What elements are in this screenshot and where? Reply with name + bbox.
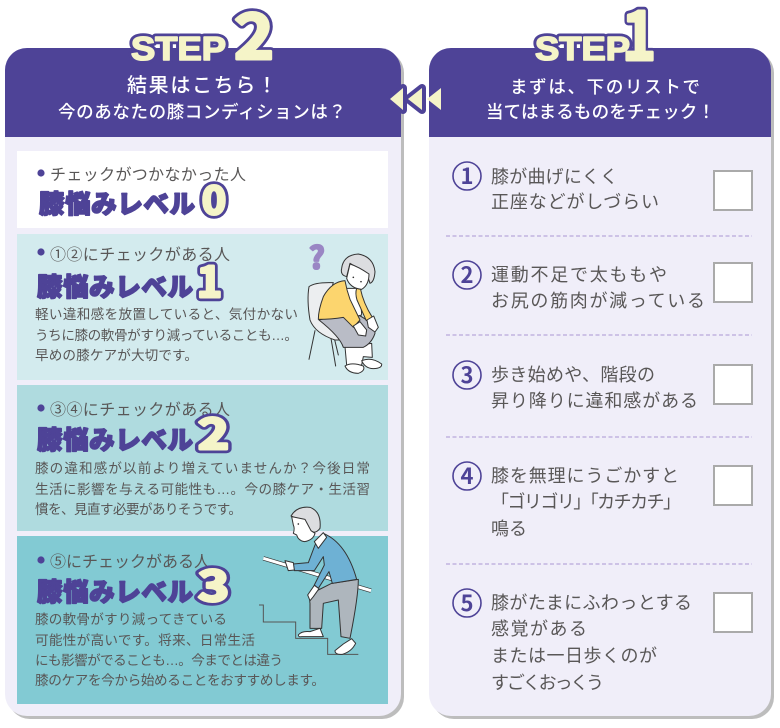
- checklist item 5: または一日歩くのが: [491, 646, 657, 666]
- checklist item 5: [453, 586, 752, 693]
- result: level 1: [17, 234, 388, 380]
- illustration: seated elderly woman with question mark: [308, 233, 382, 373]
- heading: step 1 header text: [486, 77, 715, 122]
- result: level 0: 膝悩みレベル: [39, 191, 195, 219]
- result: level 3: ⑤にチェックがある人: [50, 553, 210, 571]
- result: level 2: ③④にチェックがある人: [50, 401, 230, 419]
- result: level 1: ①②にチェックがある人: [50, 246, 230, 264]
- checklist item 5: 感覚がある: [491, 619, 587, 639]
- heading: step 2 header text: 今のあなたの膝コンディションは？: [58, 102, 346, 122]
- checklist item 5: 膝がたまにふわっとする: [491, 593, 692, 613]
- arrows: pointing from step 1 to step 2: [390, 88, 441, 110]
- checklist item 3: 3: [461, 358, 473, 390]
- checklist item 5: すごくおっくう: [491, 673, 604, 693]
- checklist item 3: 歩き始めや、階段の: [491, 365, 655, 385]
- step 1 badge: STEP: [535, 30, 630, 67]
- heading: step 1 header text: まずは、下のリストで: [510, 77, 700, 97]
- result: level 0: [17, 151, 388, 228]
- result: level 1: うちに膝の軟骨がすり減っていることも…。: [35, 327, 298, 343]
- step 2 badge: STEP: [131, 30, 226, 67]
- result: level 2: 2: [198, 401, 229, 462]
- result: level 2: 2: [198, 401, 229, 462]
- checklist item 1: 膝が曲げにくく: [491, 167, 618, 187]
- panel: step 2 results: [5, 48, 404, 719]
- result: level 1: 膝悩みレベル: [37, 274, 193, 302]
- result: level 3: [17, 536, 388, 704]
- result: level 2: [17, 385, 388, 531]
- checklist item 1: 1: [461, 159, 473, 191]
- checklist item 2: 運動不足で太ももや: [491, 265, 667, 285]
- checklist item 3: 昇り降りに違和感がある: [491, 391, 698, 411]
- panel: step 1 checklist: [429, 48, 774, 719]
- checklist item 2: [453, 258, 752, 311]
- checklist item 4: 「ゴリゴリ」「カチカチ」: [491, 492, 681, 512]
- heading: step 1 header text: 当てはまるものをチェック！: [486, 102, 715, 122]
- checklist item 3: [453, 358, 752, 411]
- result: level 3: 可能性が高いです。将来、日常生活: [35, 632, 255, 648]
- step 1 badge: [535, 0, 656, 80]
- result: level 2: 膝の違和感が以前より増えていませんか？今後日常: [35, 460, 370, 476]
- checklist item 2: お尻の筋肉が減っている: [491, 291, 705, 311]
- result: level 2: 慣を、見直す必要がありそうです。: [35, 501, 242, 517]
- result: level 0: チェックがつかなかった人: [50, 166, 246, 184]
- result: level 1: 早めの膝ケアが大切です。: [35, 348, 198, 363]
- checklist item 1: 正座などがしづらい: [491, 192, 659, 212]
- checklist item 2: 2: [461, 258, 473, 290]
- result: level 2: 膝悩みレベル: [37, 427, 193, 455]
- result: level 3: にも影響がでることも…。今までとは違う: [35, 653, 283, 668]
- heading: step 2 header text: 結果はこちら！: [127, 74, 277, 97]
- result: level 3: 3: [198, 553, 229, 614]
- checklist item 4: 膝を無理にうごかすと: [491, 466, 679, 486]
- step 2 badge: [131, 0, 274, 77]
- step 1 badge: STEP: [535, 30, 630, 67]
- illustration: elderly man climbing stairs: [259, 507, 371, 654]
- checklist item 4: 4: [461, 459, 474, 491]
- result: level 3: 膝のケアを今から始めることをおすすめします。: [35, 673, 325, 688]
- result: level 3: 膝悩みレベル: [37, 579, 193, 607]
- checklist item 5: 5: [461, 586, 473, 618]
- result: level 1: 1: [197, 249, 222, 310]
- checklist item 4: 鳴る: [491, 519, 527, 539]
- result: level 2: 生活に影響を与える可能性も…。今の膝ケア・生活習: [35, 482, 370, 497]
- step 2 badge: STEP: [131, 30, 226, 67]
- result: level 3: 膝の軟骨がすり減ってきている: [35, 611, 227, 627]
- result: level 1: 1: [197, 249, 222, 310]
- result: level 0: 0: [202, 170, 226, 225]
- result: level 1: 軽い違和感を放置していると、気付かない: [35, 306, 298, 322]
- illustration: seated elderly woman with question mark: ?: [309, 233, 325, 278]
- checklist item 4: [453, 459, 752, 539]
- result: level 0: 0: [202, 170, 226, 225]
- result: level 3: 3: [198, 553, 229, 614]
- heading: step 2 header text: [58, 74, 346, 122]
- checklist item 1: [453, 159, 752, 212]
